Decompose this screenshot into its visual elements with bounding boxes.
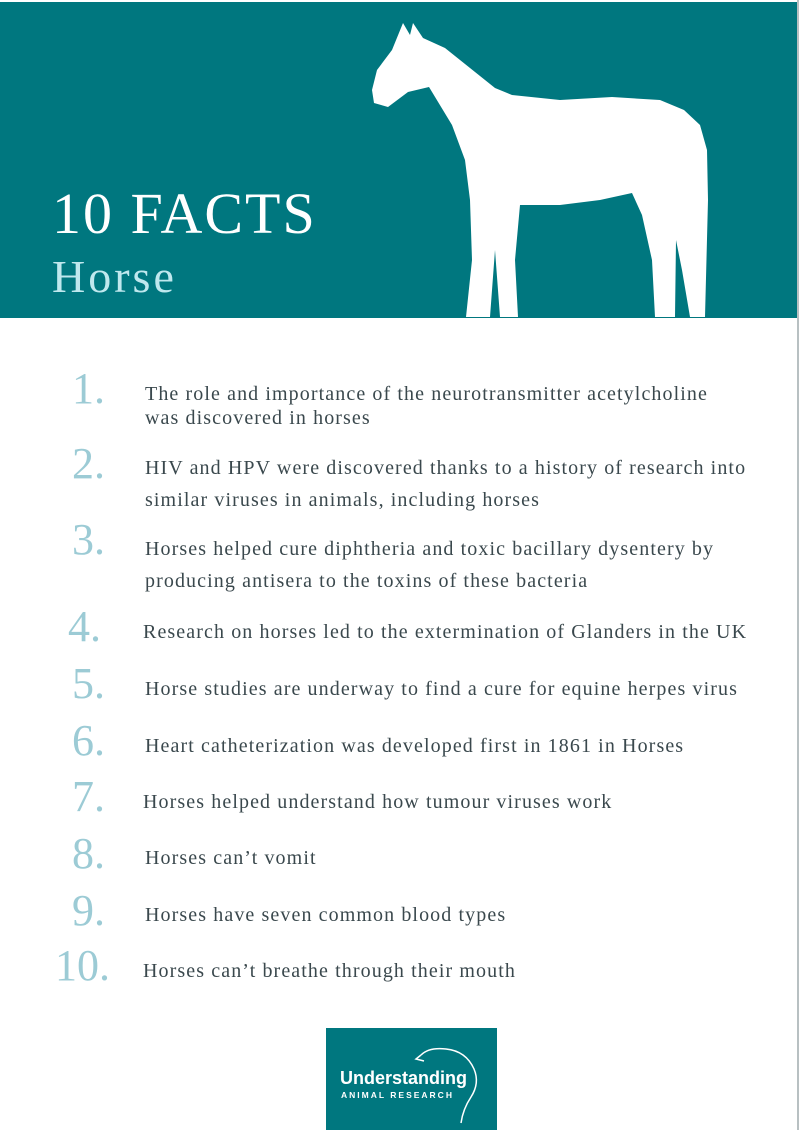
header band [0, 2, 798, 318]
facts list: producing antisera to the toxins of these bacteria [145, 570, 588, 592]
facts list: Horses can’t breathe through their mouth [143, 960, 516, 982]
fact 4 [68, 602, 747, 651]
fact 1 [72, 364, 708, 429]
facts list: 9. [72, 886, 105, 935]
facts list: Heart catheterization was developed first in 1861 in Horses [145, 735, 684, 757]
fact 9 [72, 886, 506, 935]
facts list: 5. [72, 659, 105, 708]
facts list: 8. [72, 829, 105, 878]
facts list: Horse studies are underway to find a cure for equine herpes virus [145, 678, 738, 700]
facts list: The role and importance of the neurotransmitter acetylcholine [145, 383, 708, 405]
facts list: was discovered in horses [145, 407, 371, 429]
facts list: Horses have seven common blood types [145, 904, 506, 926]
fact 6 [72, 716, 684, 765]
fact 2 [72, 439, 746, 511]
facts list: 4. [68, 602, 101, 651]
facts list: 1. [72, 364, 105, 413]
facts list: Horses can’t vomit [145, 847, 317, 869]
fact 7 [72, 772, 612, 821]
fact 5 [72, 659, 738, 708]
fact 8 [72, 829, 317, 878]
logo icon: rat outline [414, 1048, 478, 1124]
fact 3 [72, 515, 714, 592]
facts list [55, 364, 747, 990]
right border [797, 0, 799, 1130]
horse silhouette [372, 23, 708, 317]
title: 10 FACTS [52, 181, 317, 246]
facts list: 7. [72, 772, 105, 821]
facts list: 10. [55, 941, 110, 990]
facts list: 2. [72, 439, 105, 488]
facts list: 3. [72, 515, 105, 564]
logo [326, 1028, 497, 1130]
logo: ANIMAL RESEARCH [341, 1090, 454, 1100]
facts list: HIV and HPV were discovered thanks to a history of research into [145, 457, 746, 479]
facts list: Horses helped cure diphtheria and toxic bacillary dysentery by [145, 538, 714, 560]
logo text: Understanding [340, 1068, 467, 1088]
facts list: Horses helped understand how tumour viruses work [143, 791, 612, 813]
fact 10 [55, 941, 516, 990]
facts list: 6. [72, 716, 105, 765]
facts list: similar viruses in animals, including horses [145, 489, 540, 511]
subtitle: Horse [52, 251, 177, 302]
facts list: Research on horses led to the extermination of Glanders in the UK [143, 621, 747, 643]
